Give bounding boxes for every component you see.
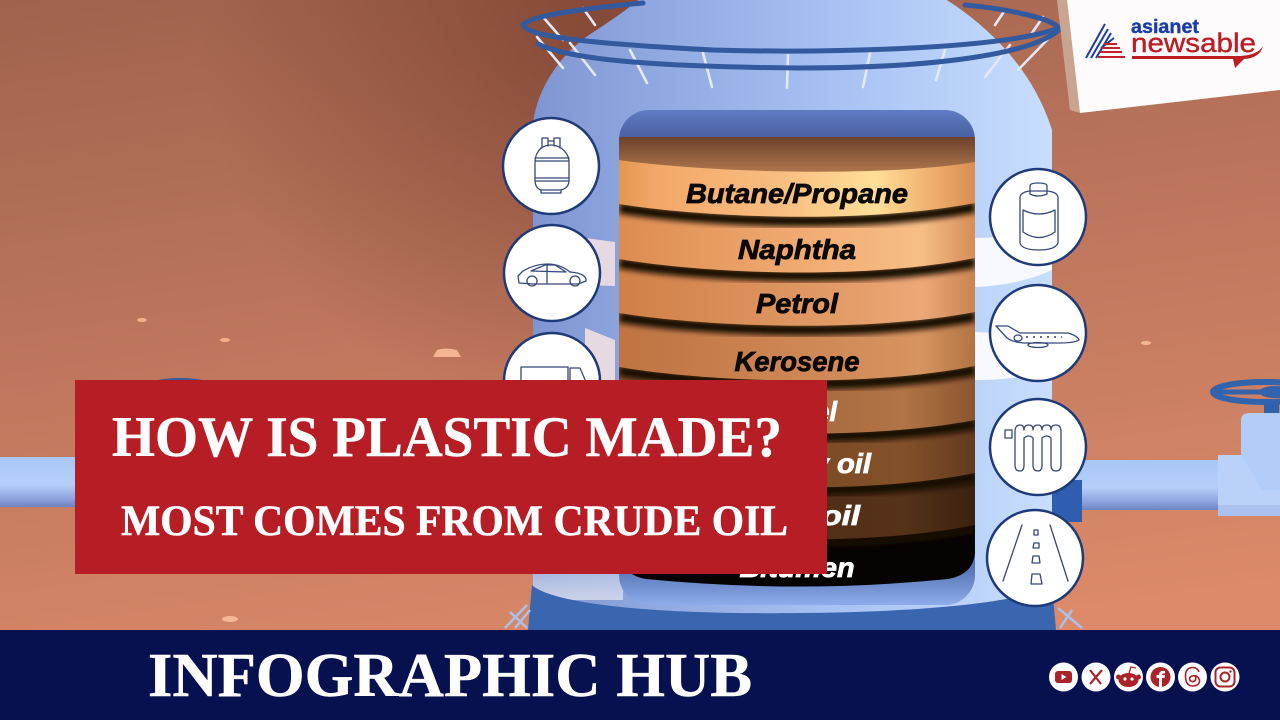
layer labels: Kerosene <box>734 346 860 377</box>
icon: threads <box>1178 662 1207 692</box>
left pipe <box>0 378 224 507</box>
layer labels: Lube oil <box>734 500 861 531</box>
base skirt and ladder <box>505 585 1082 630</box>
light reflections <box>975 222 1052 287</box>
layer: diesel <box>619 366 975 434</box>
layer labels: Petrol <box>756 288 839 319</box>
subtitle: MOST COMES FROM CRUDE OIL <box>121 498 788 545</box>
icon: reddit <box>1114 662 1143 692</box>
layer labels: Heavy oil <box>743 448 872 479</box>
layer labels: Diesel <box>757 396 838 427</box>
icon: airplane <box>990 285 1086 381</box>
icon: facebook <box>1146 662 1175 692</box>
icon: gas cylinder <box>503 118 599 214</box>
cutaway oil layers <box>619 137 975 586</box>
logo underline speech tail <box>1132 46 1263 68</box>
logo text: asianet: asianet <box>1131 17 1200 38</box>
icon: instagram <box>1210 662 1240 692</box>
icon: road <box>987 510 1083 606</box>
layer: petrol <box>619 258 975 326</box>
logo text: newsable: newsable <box>1131 28 1256 58</box>
layer labels: Naphtha <box>738 234 856 265</box>
layer: top surface <box>619 137 975 172</box>
icon: radiator <box>990 399 1086 495</box>
logo triangle mark <box>1086 24 1125 58</box>
social icons <box>1049 662 1240 692</box>
icon: x <box>1082 662 1110 692</box>
icon: truck <box>504 333 600 429</box>
layer: heavy oil <box>827 420 975 488</box>
layer: kerosene <box>619 312 975 380</box>
layer: bitumen <box>632 525 975 586</box>
storage tank body <box>533 0 1052 630</box>
title: HOW IS PLASTIC MADE? <box>112 406 782 469</box>
railing on dome <box>523 3 1059 88</box>
layer labels <box>686 178 908 583</box>
tank window frame <box>619 110 975 605</box>
logo card <box>1057 0 1280 113</box>
layer: butane/propane <box>619 160 975 217</box>
layer labels: Bitumen <box>740 552 854 583</box>
footer bar <box>0 630 1280 720</box>
panel: red headline <box>75 380 827 574</box>
icon: paint tin <box>990 169 1086 265</box>
layer: naphtha <box>619 203 975 272</box>
layer labels: Butane/Propane <box>686 178 908 209</box>
icon: youtube <box>1049 662 1078 692</box>
layer: lube oil <box>827 473 975 540</box>
right pipe and valve <box>1048 382 1280 522</box>
footer heading: INFOGRAPHIC HUB <box>148 642 752 710</box>
icon: car <box>504 225 600 321</box>
